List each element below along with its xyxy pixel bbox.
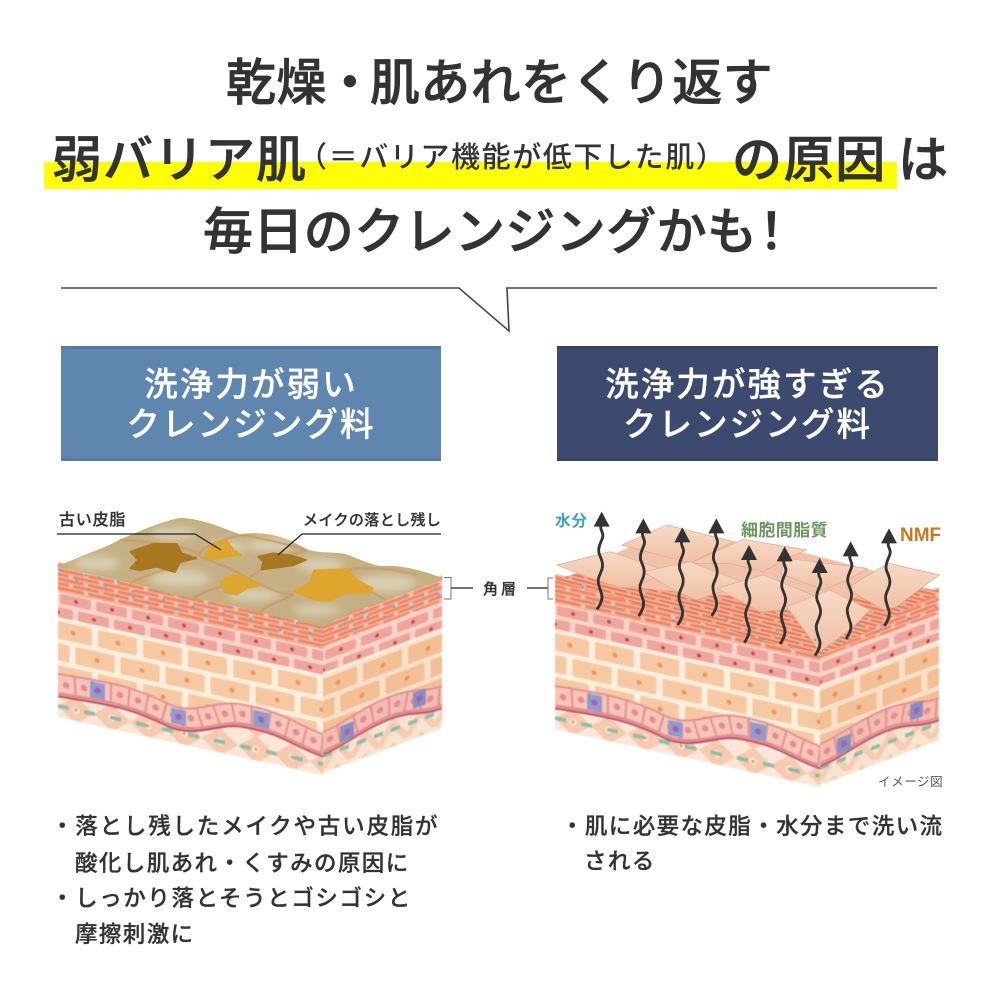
bullet 2 line 1: ・しっかり落とそうとゴシゴシと	[51, 886, 412, 911]
panel: weak cleansing header: クレンジング料	[126, 407, 376, 444]
water dots	[60, 569, 440, 637]
panel: weak cleansing header: 洗浄力が弱い	[144, 367, 358, 404]
title line 1: 乾燥・肌あれをくり返す	[226, 55, 773, 111]
skin flakes and rising water arrows	[555, 512, 939, 657]
label: old sebum: 古い皮脂	[59, 512, 126, 529]
water dots	[581, 586, 937, 648]
bullet line 1: ・肌に必要な皮脂・水分まで洗い流	[561, 814, 943, 839]
stain: makeup yellow	[205, 541, 373, 601]
bullet 2 line 2: 摩擦刺激に	[75, 922, 195, 947]
skin illustrations	[56, 512, 940, 788]
title line 2: cause: の原因	[732, 132, 887, 188]
bracket and connector lines for stratum corneum	[444, 578, 553, 599]
label: NMF: NMF	[900, 525, 941, 546]
text block: left bullets	[51, 814, 439, 947]
panel: weak cleansing header	[61, 346, 441, 461]
label: intercellular lipids: 細胞間脂質	[741, 521, 828, 540]
label: stratum corneum: 角層	[483, 581, 519, 598]
title line 3: 毎日のクレンジングかも！	[203, 204, 797, 260]
title line 2: weak barrier skin: 弱バリア肌	[52, 132, 307, 188]
panel: strong cleansing header	[557, 346, 938, 461]
skin surface with sebum and makeup stains	[58, 518, 442, 637]
skin block: left	[58, 518, 442, 780]
flakes	[557, 525, 939, 652]
bullet 1 line 2: 酸化し肌あれ・くすみの原因に	[75, 851, 410, 876]
label: water: 水分	[555, 513, 588, 530]
speech bubble divider line	[61, 287, 937, 333]
stain: old sebum brown	[131, 544, 306, 572]
title line 2: particle: は	[898, 132, 948, 188]
leader lines for left labels	[57, 534, 441, 555]
title	[52, 55, 948, 260]
label: image note: イメージ図	[878, 775, 943, 789]
panel: strong cleansing header: 洗浄力が強すぎる	[605, 367, 890, 404]
bullet line 2: される	[584, 849, 656, 874]
bullet 1 line 1: ・落とし残したメイクや古い皮脂が	[51, 814, 439, 839]
label: leftover makeup: メイクの落とし残し	[303, 512, 441, 529]
highlight band	[44, 162, 897, 189]
arrows	[594, 512, 897, 656]
title line 2: parenthetical: （＝バリア機能が低下した肌）	[298, 142, 726, 174]
panel: strong cleansing header: クレンジング料	[623, 407, 872, 444]
skin block: right	[555, 512, 939, 792]
text block: right bullet	[561, 814, 943, 874]
